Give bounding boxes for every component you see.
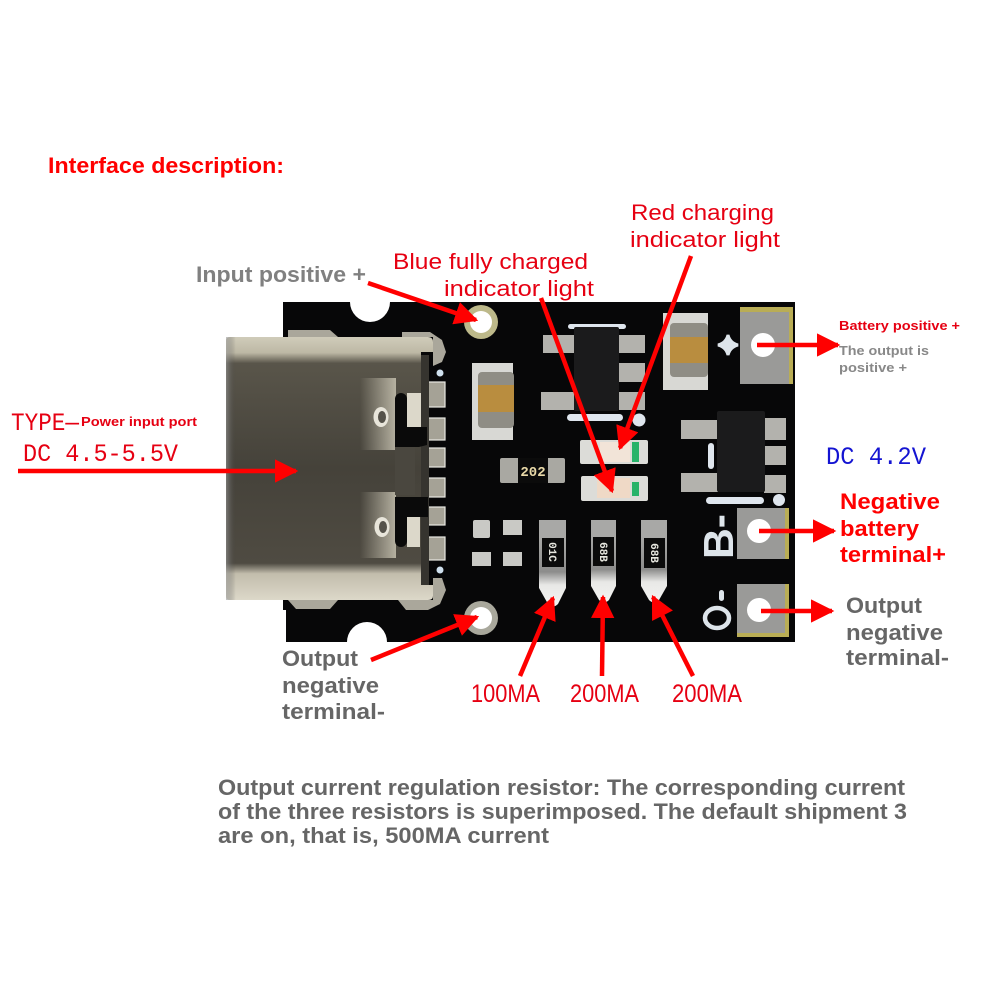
label: output negative terminal right: Output <box>846 593 923 618</box>
resistor 202: 202 <box>520 465 546 481</box>
silkscreen marks <box>695 335 742 628</box>
mounting holes <box>464 305 498 635</box>
label: battery positive: positive + <box>839 360 907 375</box>
label: negative battery terminal: Negative <box>840 489 940 514</box>
label: input positive: Input positive + <box>196 262 366 287</box>
current resistors: 68B <box>596 542 608 562</box>
capacitor right <box>663 313 708 390</box>
label: output negative terminal right: negative <box>846 620 943 645</box>
capacitor left <box>472 363 514 440</box>
label: power input port: TYPE— <box>11 409 80 438</box>
label: red charging indicator <box>630 200 780 252</box>
label: power input port <box>11 409 198 469</box>
small pads <box>472 520 522 566</box>
label: output negative terminal left: Output <box>282 646 359 671</box>
label: battery positive: Battery positive + <box>839 318 960 333</box>
label: current values: 100MA <box>471 680 540 708</box>
description text <box>218 775 907 848</box>
battery and output pads <box>737 307 793 637</box>
label: battery positive <box>839 318 960 375</box>
label: blue fully charged indicator: indicator light <box>444 276 594 301</box>
description text: Output current regulation resistor: The corresponding current <box>218 775 906 800</box>
label: negative battery terminal <box>840 489 946 567</box>
silkscreen marks: B- <box>695 514 742 559</box>
arrows <box>18 256 838 676</box>
label: power input port: Power input port <box>81 414 198 429</box>
IC left <box>541 324 645 421</box>
current resistors: 01C <box>545 542 557 562</box>
description text: are on, that is, 500MA current <box>218 823 550 848</box>
label: current values <box>471 680 742 708</box>
label: output negative terminal right: terminal- <box>846 645 949 670</box>
label: current values: 200MA <box>570 680 639 708</box>
label: power input port: DC 4.5-5.5V <box>23 440 178 469</box>
label: blue fully charged indicator <box>393 249 594 301</box>
title: Interface description: <box>48 153 284 178</box>
panel: PCB <box>283 302 795 642</box>
label: negative battery terminal: battery <box>840 516 920 541</box>
label: battery positive: The output is <box>839 343 929 358</box>
label: DC 4.2V: DC 4.2V <box>826 443 926 472</box>
IC right <box>632 411 786 506</box>
label: red charging indicator: indicator light <box>630 227 780 252</box>
circuit board <box>226 302 795 642</box>
label: blue fully charged indicator: Blue fully charged <box>393 249 588 274</box>
current resistors: 68B <box>647 543 659 563</box>
label: output negative terminal left <box>282 646 385 724</box>
LED indicators <box>580 440 648 501</box>
USB-C connector <box>226 337 433 600</box>
label: output negative terminal right <box>846 593 949 670</box>
label: current values: 200MA <box>672 680 742 708</box>
connector solder tabs <box>288 330 446 610</box>
resistor 202 <box>500 458 565 483</box>
label: negative battery terminal: terminal+ <box>840 542 946 567</box>
label: output negative terminal left: negative <box>282 673 379 698</box>
label: red charging indicator: Red charging <box>631 200 774 225</box>
description text: of the three resistors is superimposed. The default shipment 3 <box>218 799 907 824</box>
current resistors <box>539 520 667 606</box>
connector contact pads <box>428 382 445 560</box>
label: output negative terminal left: terminal- <box>282 699 385 724</box>
